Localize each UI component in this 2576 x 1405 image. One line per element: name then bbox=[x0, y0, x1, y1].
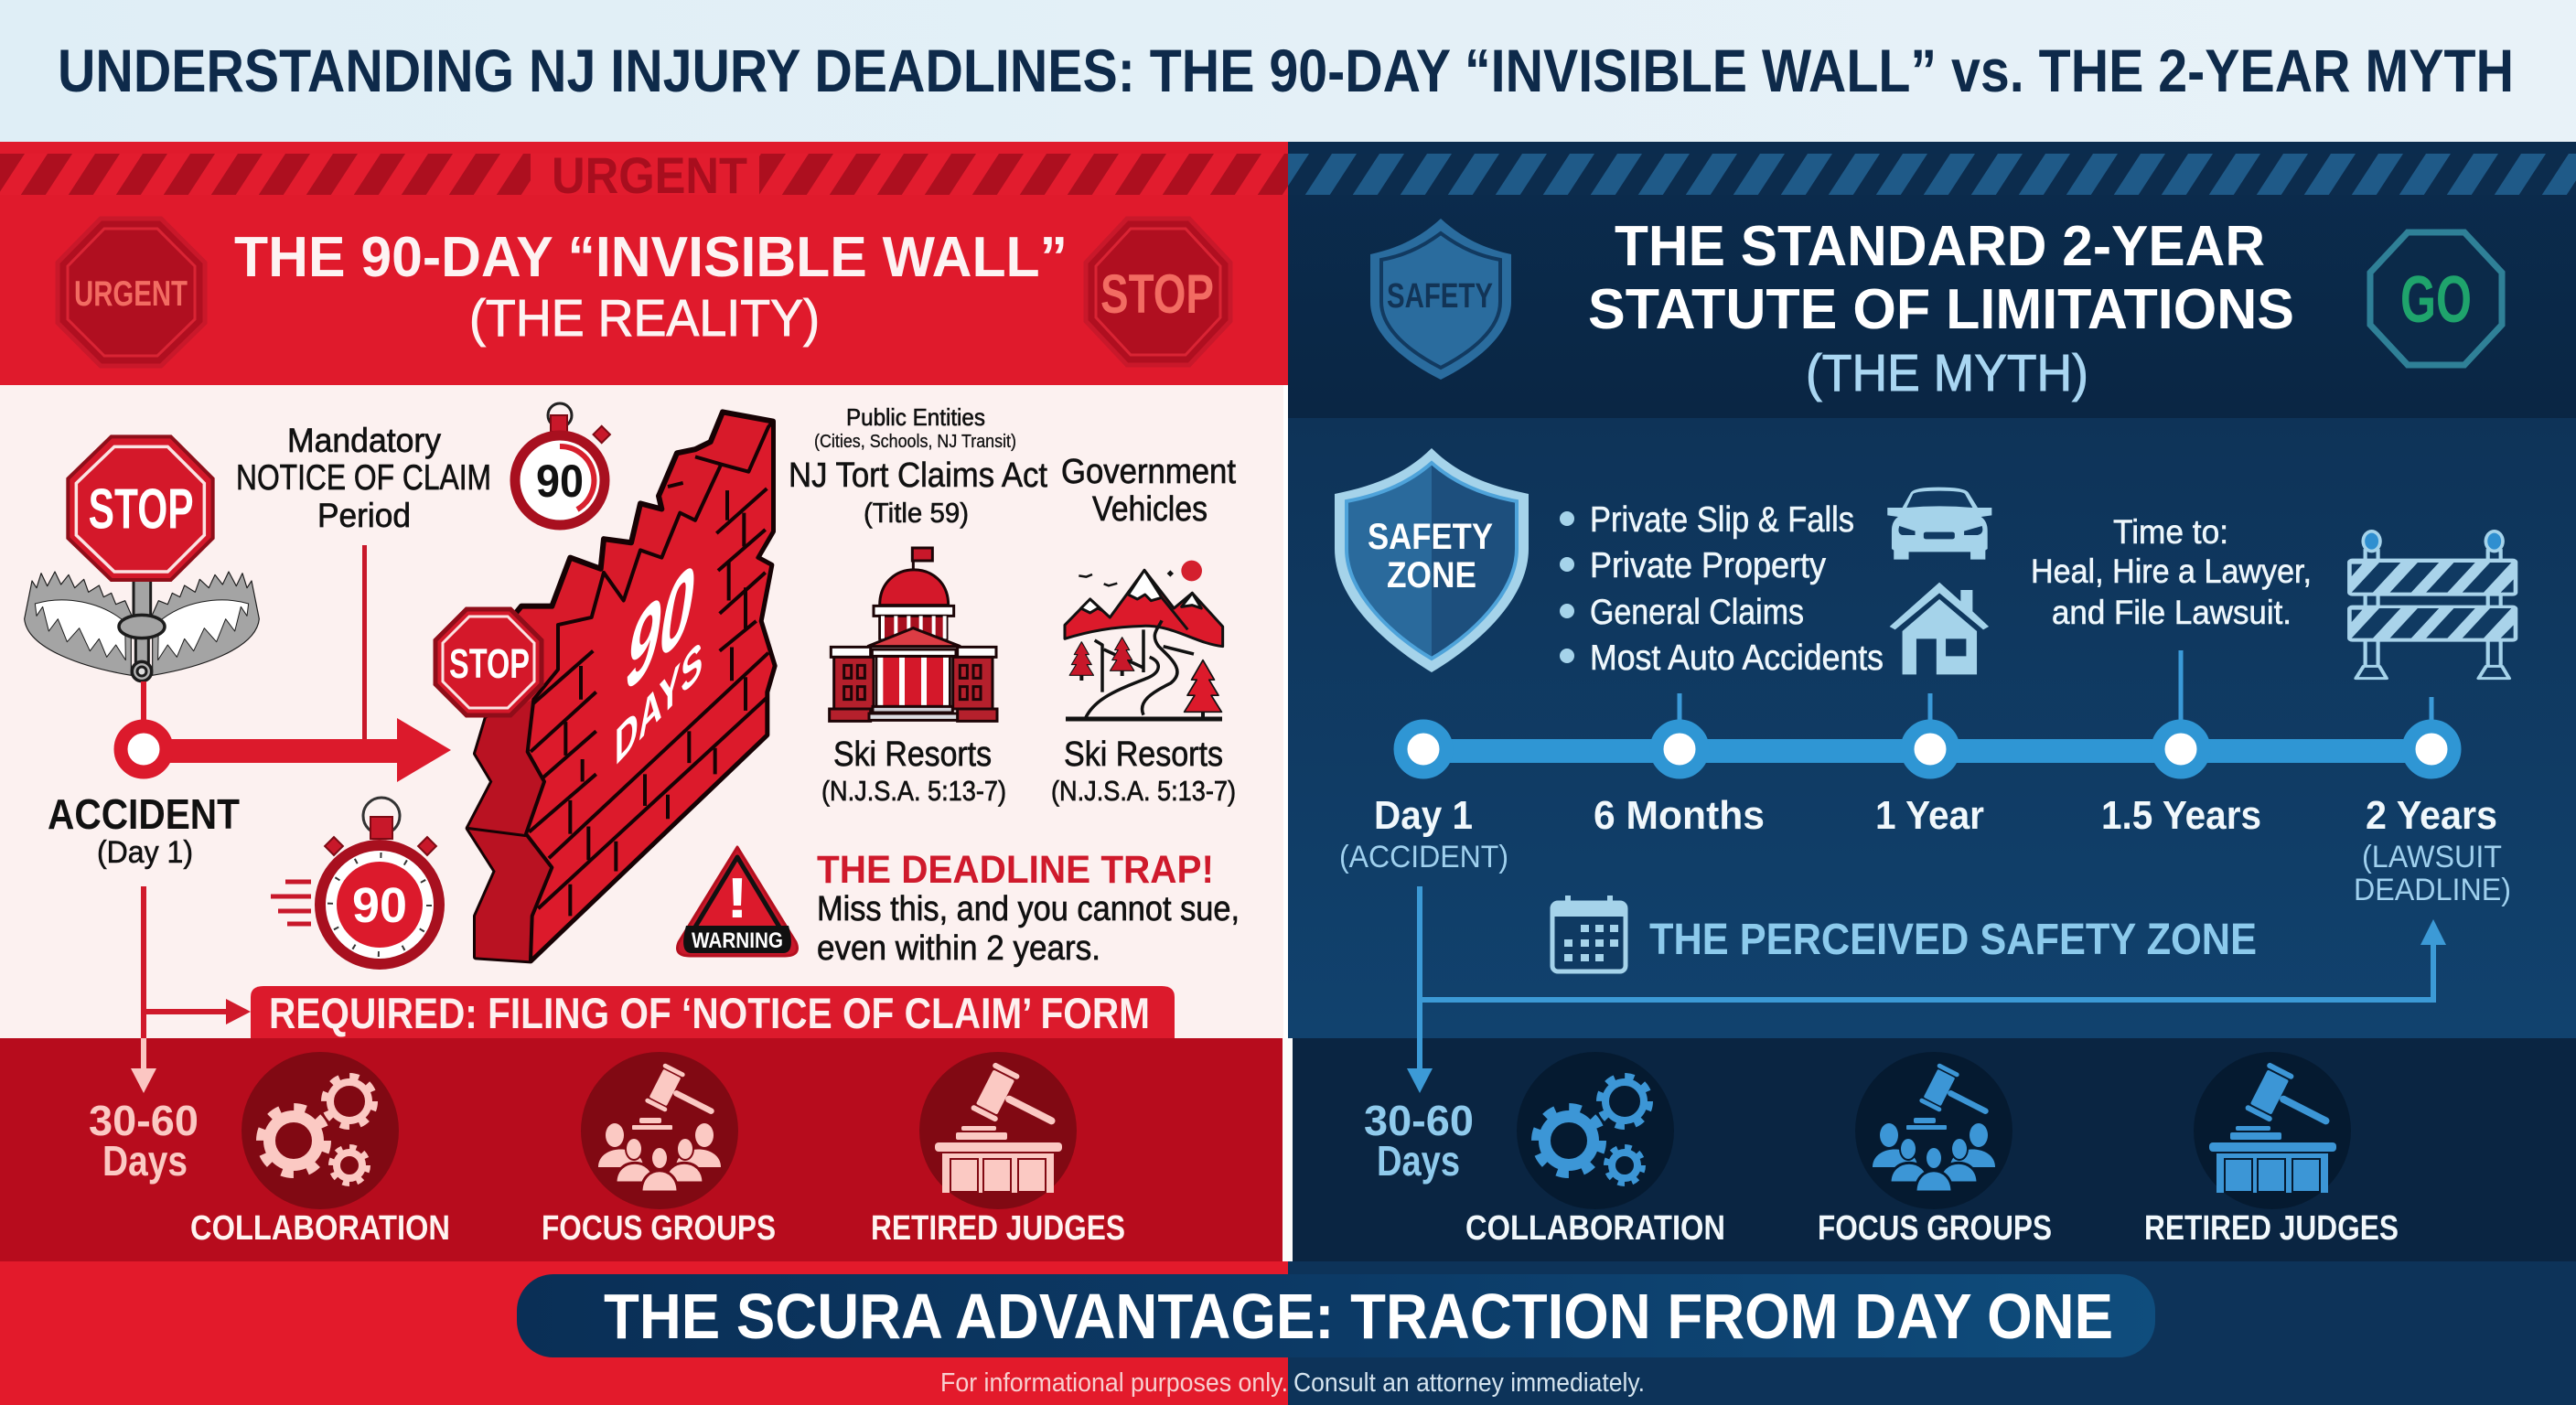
text: 30-60 days left: 30-60 bbox=[89, 1097, 199, 1144]
labels: left bottom band: RETIRED JUDGES bbox=[871, 1209, 1125, 1248]
text: ski resorts left: (N.J.S.A. 5:13-7) bbox=[821, 775, 1006, 807]
icon: collaboration gears red bbox=[242, 1052, 399, 1209]
icon: stop octagon bbox=[1086, 219, 1230, 365]
timeline labels: Day 1 bbox=[1374, 793, 1473, 838]
icon: bear trap with stop sign bbox=[25, 436, 259, 681]
panel: right, the standard 2-year statute bbox=[1283, 142, 2576, 1261]
bullet list: private claims: Private Property bbox=[1590, 546, 1826, 585]
heading: standard 2-year statute of limitations: STATUTE OF LIMITATIONS bbox=[1588, 278, 2294, 341]
icon: warning triangle: WARNING bbox=[692, 928, 783, 953]
hazard stripe band with URGENT bbox=[0, 146, 1288, 204]
disclaimer text: Consult an attorney immediately. bbox=[1293, 1368, 1645, 1398]
text: accident day 1: ACCIDENT bbox=[48, 790, 240, 838]
text: mandatory notice of claim period bbox=[236, 422, 491, 534]
text: mandatory notice of claim period: NOTICE OF CLAIM bbox=[236, 458, 491, 498]
panel: left, the 90-day invisible wall bbox=[0, 142, 1288, 1261]
white divider between bands bbox=[1283, 1038, 1293, 1261]
text: ski resorts right: Ski Resorts bbox=[1064, 735, 1223, 774]
icon: stop sign on wall: STOP bbox=[449, 640, 530, 687]
hazard stripe band, blue bbox=[1288, 154, 2576, 195]
icon: small stopwatch bbox=[515, 403, 610, 525]
text: accident day 1: (Day 1) bbox=[97, 835, 193, 870]
disclaimer text: For informational purposes only. bbox=[940, 1368, 1288, 1398]
text: government vehicles: Vehicles bbox=[1092, 490, 1208, 529]
icon: mountain ski resort bbox=[1065, 561, 1223, 719]
icon: go octagon bbox=[2370, 232, 2502, 365]
timeline labels: (ACCIDENT) bbox=[1339, 840, 1508, 874]
text: 30-60 days right bbox=[1364, 1097, 1474, 1185]
icon: urgent octagon bbox=[58, 219, 205, 366]
icon: brick wall 90 days bbox=[468, 412, 775, 960]
icon: warning triangle: ! bbox=[726, 867, 748, 930]
banner: the scura advantage: THE SCURA ADVANTAGE: TRACTION FROM DAY ONE bbox=[604, 1281, 2113, 1352]
icon: road barrier bbox=[2347, 530, 2517, 679]
icon: retired judges blue bbox=[2194, 1052, 2351, 1209]
arrow: branch from accident to notice form bbox=[141, 886, 251, 1038]
icon: safety zone shield bbox=[1335, 448, 1529, 672]
timeline labels: 6 Months bbox=[1594, 793, 1765, 838]
icon: safety zone shield: SAFETY bbox=[1368, 517, 1493, 557]
text: accident day 1 bbox=[48, 790, 240, 870]
left bottom band bbox=[0, 1038, 1283, 1261]
heading: the 90-day invisible wall: THE 90-DAY “INVISIBLE WALL” bbox=[234, 226, 1068, 289]
timeline labels: (LAWSUIT bbox=[2362, 840, 2502, 874]
text: ski resorts right bbox=[1051, 735, 1236, 807]
icon: safety zone shield: ZONE bbox=[1387, 555, 1476, 595]
text: ski resorts left bbox=[821, 735, 1006, 807]
text: mandatory notice of claim period: Period bbox=[317, 497, 411, 534]
text: 30-60 days right: 30-60 bbox=[1364, 1097, 1474, 1144]
bullet list: private claims: Most Auto Accidents bbox=[1590, 638, 1884, 678]
text: mandatory notice of claim period: Mandatory bbox=[287, 422, 441, 459]
icon: house bbox=[1890, 583, 1989, 674]
bullet list: private claims bbox=[1560, 500, 1884, 678]
text: public entities and tort claims act: Public Entities bbox=[846, 403, 985, 431]
icon: urgent octagon: URGENT bbox=[74, 274, 188, 314]
text: government vehicles bbox=[1061, 453, 1236, 529]
callout: the deadline trap: even within 2 years. bbox=[817, 929, 1100, 968]
right bottom band bbox=[1288, 1038, 2576, 1261]
heading: standard 2-year statute of limitations: (THE MYTH) bbox=[1806, 344, 2088, 402]
blue content panel bbox=[1288, 418, 2576, 1038]
icon: warning triangle bbox=[677, 847, 798, 956]
icon: large stopwatch bbox=[271, 798, 439, 964]
text: public entities and tort claims act: NJ Tort Claims Act bbox=[789, 456, 1047, 495]
heading: standard 2-year statute of limitations: THE STANDARD 2-YEAR bbox=[1615, 215, 2265, 278]
icon: retired judges red bbox=[919, 1052, 1077, 1209]
bullet list: private claims: Private Slip & Falls bbox=[1590, 500, 1854, 540]
labels: right bottom band: RETIRED JUDGES bbox=[2144, 1209, 2399, 1248]
timeline labels: DEADLINE) bbox=[2354, 873, 2511, 907]
icon: go octagon: GO bbox=[2400, 263, 2472, 337]
arrow: safety zone route to lawsuit deadline bbox=[1420, 919, 2446, 1000]
labels: right bottom band bbox=[1465, 1209, 2399, 1248]
text: 30-60 days left: Days bbox=[102, 1137, 188, 1185]
heading: standard 2-year statute of limitations bbox=[1588, 215, 2294, 402]
timeline labels: 1.5 Years bbox=[2101, 793, 2261, 838]
text: public entities and tort claims act bbox=[789, 403, 1047, 529]
disclaimer text bbox=[940, 1368, 1645, 1398]
icon: large stopwatch: 90 bbox=[352, 878, 407, 933]
icon: safety shield outline bbox=[1370, 219, 1511, 380]
icon: car bbox=[1887, 488, 1991, 560]
top title banner bbox=[0, 0, 2576, 142]
heading: the 90-day invisible wall bbox=[234, 226, 1068, 348]
callout: required notice of claim form: REQUIRED: FILING OF ‘NOTICE OF CLAIM’ FORM bbox=[269, 989, 1150, 1037]
icon: capitol building bbox=[830, 547, 997, 721]
labels: left bottom band bbox=[190, 1209, 1125, 1248]
connector line from notice period to arrow bbox=[362, 545, 367, 741]
icon: focus groups blue bbox=[1855, 1052, 2012, 1209]
callout: the deadline trap: THE DEADLINE TRAP! bbox=[817, 848, 1214, 892]
arrow: down to 30-60 days right bbox=[1407, 886, 1433, 1093]
text: time to heal, hire a lawyer bbox=[2031, 513, 2312, 631]
text: ski resorts right: (N.J.S.A. 5:13-7) bbox=[1051, 775, 1236, 807]
labels: left bottom band: FOCUS GROUPS bbox=[542, 1209, 776, 1248]
text: government vehicles: Government bbox=[1061, 453, 1236, 491]
heading: the 90-day invisible wall: (THE REALITY) bbox=[469, 289, 820, 348]
bullet list: private claims: General Claims bbox=[1590, 593, 1804, 632]
icon: calendar bbox=[1552, 896, 1626, 971]
timeline labels: 1 Year bbox=[1875, 793, 1984, 838]
callout: the deadline trap bbox=[817, 848, 1240, 968]
chart: two-year timeline bbox=[1401, 650, 2454, 772]
arrow: accident to wall with node bbox=[121, 681, 451, 782]
icon: stop octagon: STOP bbox=[1100, 263, 1214, 325]
footer band bbox=[0, 1261, 2576, 1405]
timeline labels: 2 Years bbox=[2366, 793, 2497, 838]
icon: safety shield outline: SAFETY bbox=[1387, 277, 1493, 316]
text: time to heal, hire a lawyer: Time to: bbox=[2113, 513, 2228, 551]
text: time to heal, hire a lawyer: Heal, Hire a Lawyer, bbox=[2031, 552, 2312, 590]
hazard stripe band with URGENT: URGENT bbox=[552, 146, 747, 204]
timeline labels bbox=[1339, 793, 2511, 907]
icon: small stopwatch: 90 bbox=[536, 456, 584, 507]
heading: the perceived safety zone: THE PERCEIVED SAFETY ZONE bbox=[1649, 916, 2257, 964]
text: 30-60 days left bbox=[89, 1097, 199, 1185]
pink arrow over band bbox=[131, 1038, 156, 1093]
text: public entities and tort claims act: (Title 59) bbox=[864, 497, 969, 529]
text: ski resorts left: Ski Resorts bbox=[833, 735, 992, 774]
text: time to heal, hire a lawyer: and File Lawsuit. bbox=[2052, 594, 2292, 631]
labels: right bottom band: COLLABORATION bbox=[1465, 1209, 1725, 1248]
text: public entities and tort claims act: (Cities, Schools, NJ Transit) bbox=[814, 432, 1016, 452]
icon: bear trap with stop sign: STOP bbox=[89, 477, 194, 541]
text: 30-60 days right: Days bbox=[1377, 1137, 1460, 1185]
icon: brick wall 90 days: DAYS bbox=[615, 628, 703, 778]
cream content panel bbox=[0, 385, 1283, 1038]
icon: stop sign on wall bbox=[435, 609, 542, 715]
icon: focus groups red bbox=[581, 1052, 738, 1209]
icon: brick wall 90 days: 90 bbox=[618, 533, 703, 720]
labels: right bottom band: FOCUS GROUPS bbox=[1818, 1209, 2052, 1248]
labels: left bottom band: COLLABORATION bbox=[190, 1209, 450, 1248]
callout: the deadline trap: Miss this, and you cannot sue, bbox=[817, 890, 1240, 928]
icon: collaboration gears blue bbox=[1517, 1052, 1674, 1209]
